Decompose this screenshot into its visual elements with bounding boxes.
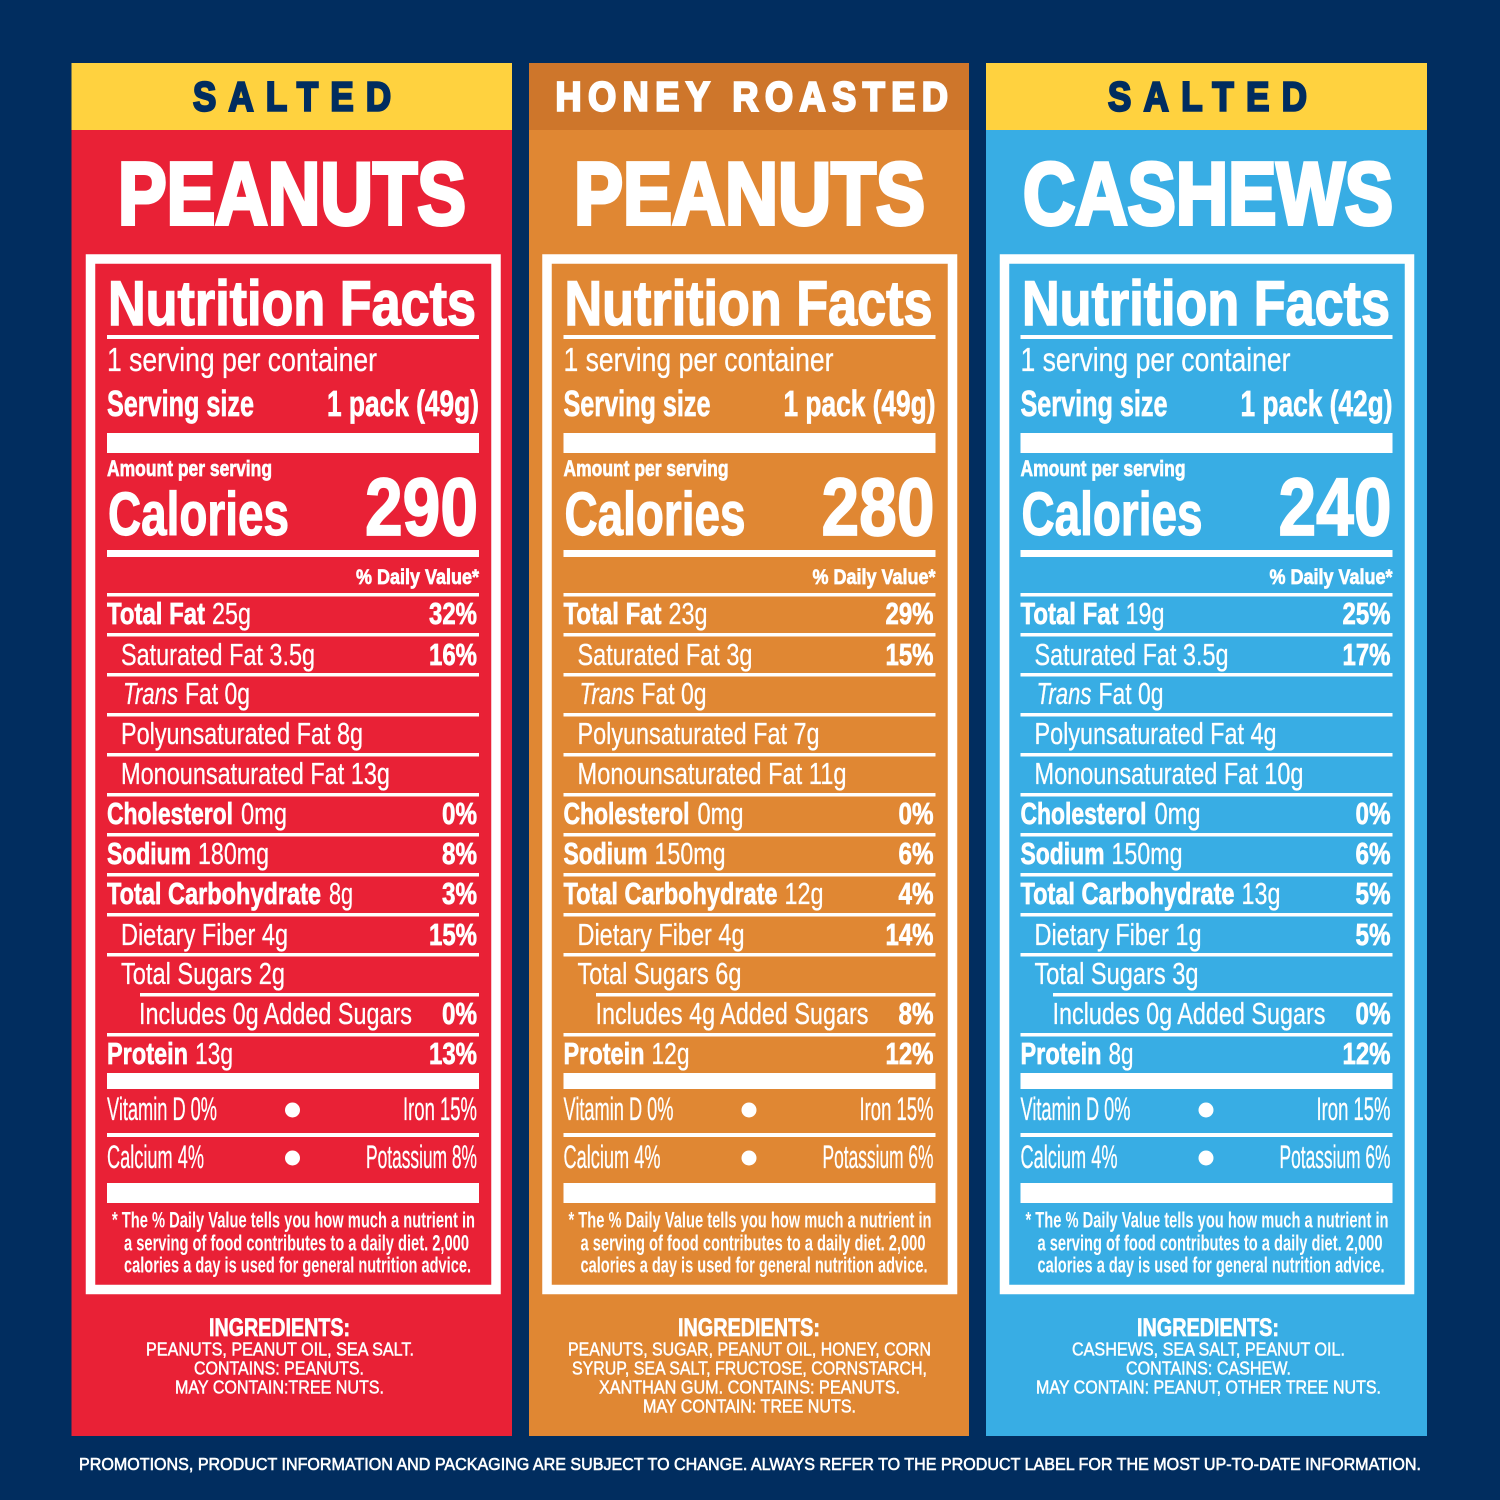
servings — [564, 341, 936, 424]
nutrient rows: Total Carbohydrate — [107, 876, 321, 911]
nutrient rows: 12g — [784, 876, 824, 911]
nutrient rows: 150mg — [1112, 836, 1182, 871]
nutrient rows: 17% — [1342, 637, 1390, 672]
vitamins and minerals — [1020, 1091, 1392, 1175]
nutrient rows: Trans — [123, 676, 178, 711]
servings: 1 pack (49g) — [327, 383, 479, 424]
nutrient rows: 0mg — [698, 796, 744, 831]
ingredients: CASHEWS, SEA SALT, PEANUT OIL. — [1072, 1340, 1345, 1360]
calories: Calories — [1022, 480, 1202, 548]
nutrient rows: Monounsaturated Fat 10g — [1034, 756, 1304, 791]
nutrient rows: Dietary Fiber 4g — [121, 917, 288, 952]
nutrient rows: Polyunsaturated Fat 7g — [578, 716, 820, 751]
label title: Nutrition Facts — [564, 269, 932, 339]
servings: 1 pack (49g) — [784, 383, 936, 424]
nutrient rows: 6% — [898, 836, 934, 871]
nutrient rows: 8% — [898, 996, 934, 1031]
nutrient rows: 13g — [1242, 876, 1280, 911]
nutrient rows: Monounsaturated Fat 11g — [578, 756, 846, 791]
nutrient rows: Total Fat — [564, 596, 662, 631]
nutrition facts label — [547, 259, 952, 1290]
vitamins and minerals: Calcium 4% — [107, 1139, 204, 1175]
nutrient rows: 5% — [1356, 917, 1390, 952]
calories — [1020, 456, 1392, 553]
ingredients: MAY CONTAIN:TREE NUTS. — [175, 1378, 384, 1398]
nutrient rows: Total Sugars 3g — [1034, 956, 1198, 991]
ingredients: PEANUTS, SUGAR, PEANUT OIL, HONEY, CORN — [568, 1340, 931, 1360]
nutrient rows: 16% — [429, 637, 477, 672]
nutrient rows: 180mg — [198, 836, 269, 871]
nutrient rows: Cholesterol — [107, 796, 233, 831]
calories: 280 — [822, 462, 934, 553]
vitamins and minerals: Vitamin D 0% — [1020, 1091, 1130, 1127]
nutrient rows: 0% — [442, 796, 477, 831]
nutrient rows: 14% — [886, 917, 934, 952]
servings: 1 pack (42g) — [1240, 383, 1392, 424]
panel background — [986, 63, 1427, 1436]
servings: Serving size — [1020, 383, 1168, 424]
product heading: PEANUTS — [118, 144, 466, 243]
nutrient rows: 3% — [442, 876, 477, 911]
footnote: * The % Daily Value tells you how much a nutrient in — [568, 1208, 932, 1232]
nutrient rows: 0mg — [241, 796, 287, 831]
nutrient rows — [564, 593, 936, 1071]
vitamins and minerals: Calcium 4% — [564, 1139, 660, 1175]
nutrient rows: Total Carbohydrate — [564, 876, 778, 911]
nutrient rows: 15% — [429, 917, 477, 952]
vitamins and minerals: Potassium 6% — [822, 1139, 934, 1175]
ingredients: XANTHAN GUM. CONTAINS: PEANUTS. — [599, 1378, 900, 1398]
nutrient rows: 5% — [1356, 876, 1390, 911]
nutrient rows: 25g — [212, 596, 251, 631]
nutrient rows: Sodium — [564, 836, 648, 871]
nutrient rows: 8g — [1108, 1036, 1134, 1071]
servings: 1 serving per container — [107, 341, 377, 378]
servings: Serving size — [564, 383, 710, 424]
nutrient rows: Protein — [1020, 1036, 1102, 1071]
flavor banner: SALTED — [1108, 75, 1307, 120]
nutrient rows: 4% — [898, 876, 934, 911]
nutrient rows: Trans — [580, 676, 634, 711]
panel: salted peanuts — [72, 63, 512, 1436]
vitamins and minerals: Potassium 6% — [1280, 1139, 1390, 1175]
flavor banner — [986, 63, 1427, 130]
ingredients: CONTAINS: CASHEW. — [1126, 1358, 1291, 1378]
nutrient rows: 150mg — [654, 836, 726, 871]
nutrient rows: 0% — [1356, 796, 1390, 831]
calories: 240 — [1278, 462, 1392, 553]
servings — [107, 341, 479, 424]
nutrient rows: 13% — [429, 1036, 477, 1071]
nutrient rows: 23g — [668, 596, 708, 631]
ingredients: CONTAINS: PEANUTS. — [194, 1358, 364, 1378]
servings: Serving size — [107, 383, 254, 424]
footnote: a serving of food contributes to a daily diet. 2,000 — [580, 1230, 926, 1256]
ingredients: INGREDIENTS: — [678, 1314, 820, 1342]
label title: Nutrition Facts — [1022, 269, 1390, 339]
disclaimer: PROMOTIONS, PRODUCT INFORMATION AND PACKAGING ARE SUBJECT TO CHANGE. ALWAYS REFER TO THE PRODUCT LABEL FOR THE MOST UP-TO-DATE INFORMATION. — [79, 1454, 1421, 1474]
calories: 290 — [365, 462, 478, 553]
nutrient rows: 29% — [886, 596, 934, 631]
calories: Calories — [108, 480, 289, 548]
vitamins and minerals: Iron 15% — [403, 1091, 477, 1127]
nutrient rows: 19g — [1126, 596, 1164, 631]
nutrient rows: 25% — [1342, 596, 1390, 631]
daily value header: % Daily Value* — [356, 566, 480, 589]
nutrient rows: 0% — [442, 996, 477, 1031]
panel background — [529, 63, 969, 1436]
nutrient rows: 0% — [898, 796, 934, 831]
ingredients — [1036, 1314, 1381, 1398]
calories — [564, 456, 934, 553]
vitamins and minerals — [107, 1091, 479, 1175]
daily value header: % Daily Value* — [1270, 566, 1393, 589]
nutrient rows: 8g — [329, 876, 353, 911]
vitamins and minerals: Calcium 4% — [1020, 1139, 1118, 1175]
daily value header: % Daily Value* — [812, 566, 936, 589]
nutrient rows: 0% — [1356, 996, 1390, 1031]
footnote: a serving of food contributes to a daily diet. 2,000 — [124, 1230, 469, 1256]
nutrient rows: 6% — [1356, 836, 1390, 871]
footnote: * The % Daily Value tells you how much a nutrient in — [112, 1208, 475, 1232]
ingredients: MAY CONTAIN: TREE NUTS. — [643, 1396, 856, 1416]
nutrient rows: 15% — [886, 637, 934, 672]
nutrient rows: Protein — [107, 1036, 188, 1071]
nutrient rows: Cholesterol — [1020, 796, 1146, 831]
nutrient rows: 12% — [886, 1036, 934, 1071]
nutrient rows: 0mg — [1154, 796, 1200, 831]
nutrient rows: Cholesterol — [564, 796, 690, 831]
nutrient rows: 13g — [195, 1036, 233, 1071]
ingredients — [146, 1314, 414, 1398]
nutrition facts label — [1004, 259, 1410, 1290]
vitamins and minerals: Iron 15% — [860, 1091, 934, 1127]
calories: Calories — [564, 480, 746, 548]
flavor banner — [72, 63, 512, 130]
nutrient rows: Polyunsaturated Fat 8g — [121, 716, 363, 751]
ingredients: SYRUP, SEA SALT, FRUCTOSE, CORNSTARCH, — [572, 1358, 927, 1378]
nutrient rows: 12% — [1342, 1036, 1390, 1071]
flavor banner — [529, 63, 969, 130]
nutrient rows: Trans — [1036, 676, 1092, 711]
footnote: calories a day is used for general nutrition advice. — [580, 1252, 928, 1278]
nutrient rows: Polyunsaturated Fat 4g — [1034, 716, 1276, 751]
footnote — [568, 1208, 932, 1278]
nutrient rows: Dietary Fiber 4g — [578, 917, 744, 952]
ingredients — [568, 1314, 931, 1416]
nutrient rows: Includes 0g Added Sugars — [139, 996, 412, 1031]
vitamins and minerals: Vitamin D 0% — [107, 1091, 217, 1127]
nutrient rows: Includes 4g Added Sugars — [596, 996, 868, 1031]
servings: 1 serving per container — [564, 341, 834, 378]
panel: salted cashews — [986, 63, 1427, 1436]
nutrient rows: Saturated Fat 3.5g — [1034, 637, 1228, 672]
flavor banner: SALTED — [193, 75, 391, 120]
servings: 1 serving per container — [1020, 341, 1290, 378]
flavor banner: HONEY ROASTED — [556, 74, 948, 120]
panel: honey roasted peanuts — [529, 63, 969, 1436]
footnote — [112, 1208, 475, 1278]
calories: Amount per serving — [1020, 456, 1186, 481]
calories — [107, 456, 478, 553]
nutrient rows: 8% — [442, 836, 477, 871]
panel background — [72, 63, 512, 1436]
label title: Nutrition Facts — [108, 269, 476, 339]
ingredients: INGREDIENTS: — [209, 1314, 350, 1342]
nutrient rows — [107, 593, 479, 1071]
nutrient rows: Total Carbohydrate — [1020, 876, 1234, 911]
ingredients: INGREDIENTS: — [1137, 1314, 1279, 1342]
nutrient rows: 12g — [652, 1036, 690, 1071]
vitamins and minerals: Iron 15% — [1316, 1091, 1390, 1127]
footnote — [1026, 1208, 1388, 1278]
nutrient rows — [1020, 593, 1392, 1071]
nutrient rows: Total Fat — [107, 596, 205, 631]
ingredients: PEANUTS, PEANUT OIL, SEA SALT. — [146, 1340, 414, 1360]
nutrient rows: Total Sugars 6g — [578, 956, 742, 991]
nutrition facts label — [90, 259, 496, 1290]
nutrient rows: Saturated Fat 3g — [578, 637, 752, 672]
nutrient rows: Total Fat — [1020, 596, 1118, 631]
nutrient rows: 32% — [429, 596, 477, 631]
nutrient rows: Monounsaturated Fat 13g — [121, 756, 390, 791]
vitamins and minerals: Potassium 8% — [366, 1139, 477, 1175]
calories: Amount per serving — [107, 456, 272, 481]
nutrient rows: Fat 0g — [642, 676, 706, 711]
nutrient rows: Sodium — [107, 836, 191, 871]
nutrient rows: Total Sugars 2g — [121, 956, 285, 991]
servings — [1020, 341, 1392, 424]
nutrient rows: Protein — [564, 1036, 644, 1071]
footnote: calories a day is used for general nutrition advice. — [124, 1252, 471, 1278]
product heading: CASHEWS — [1023, 144, 1393, 243]
ingredients: MAY CONTAIN: PEANUT, OTHER TREE NUTS. — [1036, 1378, 1381, 1398]
nutrient rows: Includes 0g Added Sugars — [1052, 996, 1326, 1031]
vitamins and minerals — [564, 1091, 936, 1175]
nutrient rows: Dietary Fiber 1g — [1034, 917, 1202, 952]
nutrient rows: Sodium — [1020, 836, 1104, 871]
calories: Amount per serving — [564, 456, 728, 481]
nutrient rows: Fat 0g — [1098, 676, 1164, 711]
product heading: PEANUTS — [574, 144, 925, 243]
vitamins and minerals: Vitamin D 0% — [564, 1091, 674, 1127]
nutrient rows: Saturated Fat 3.5g — [121, 637, 315, 672]
nutrient rows: Fat 0g — [185, 676, 250, 711]
